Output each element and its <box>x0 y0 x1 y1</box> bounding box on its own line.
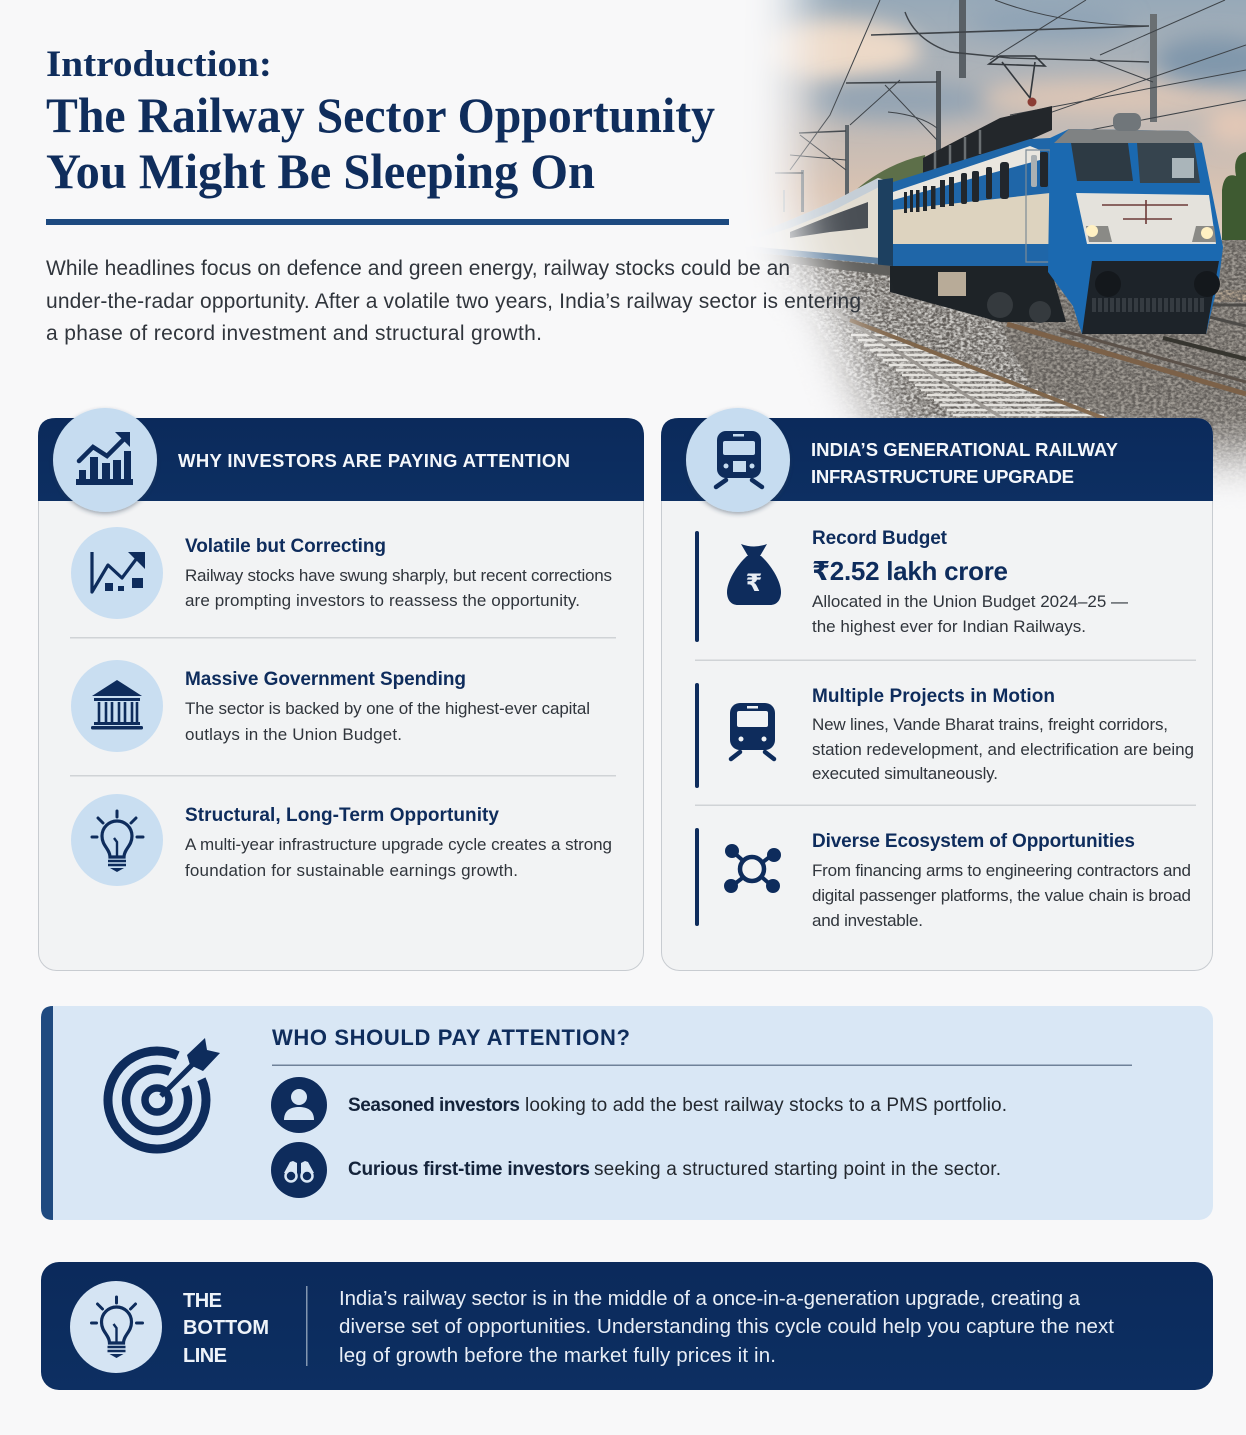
passenger coaches <box>768 178 893 276</box>
panel heading: INFRASTRUCTURE UPGRADE <box>811 466 1074 487</box>
heading line two: You Might Be Sleeping On <box>46 143 595 199</box>
item: record budget: ₹2.52 lakh crore <box>812 556 1008 586</box>
item: record budget: Allocated in the Union Budget 2024–25 — <box>812 592 1128 611</box>
panel: who should pay attention <box>41 1006 1213 1220</box>
bottom line text: diverse set of opportunities. Understanding this cycle could help you capture the next <box>339 1315 1114 1338</box>
panel: generational railway infrastructure upgrade <box>661 408 1213 970</box>
item: multiple projects in motion: station redevelopment, and electrification are being <box>812 740 1194 759</box>
item: volatile but correcting <box>71 527 612 619</box>
icon: train badge <box>686 408 790 512</box>
intro paragraph: under-the-radar opportunity. After a volatile two years, India’s railway sector is entering <box>46 290 861 313</box>
intro paragraph: a phase of record investment and structural growth. <box>46 322 542 345</box>
ground and ballast <box>774 240 1246 489</box>
audience: seasoned investors <box>271 1077 1007 1133</box>
bottom line text: India’s railway sector is in the middle of a once-in-a-generation upgrade, creating a <box>339 1287 1081 1310</box>
panel heading <box>811 439 1119 487</box>
title rule <box>46 219 729 225</box>
item: volatile but correcting: Railway stocks have swung sharply, but recent corrections <box>185 566 612 585</box>
item: record budget: ₹ <box>746 570 762 597</box>
bottom line text <box>339 1287 1114 1367</box>
hero photo: electric train on tracks <box>766 0 1246 489</box>
item: multiple projects in motion: New lines, Vande Bharat trains, freight corridors, <box>812 715 1168 734</box>
item: volatile but correcting: are prompting investors to reassess the opportunity. <box>185 591 580 610</box>
item: massive government spending <box>71 660 590 752</box>
item: structural long-term opportunity <box>71 794 612 886</box>
item: massive government spending: outlays in the Union Budget. <box>185 725 402 744</box>
cab front <box>1048 129 1223 334</box>
panel header bar <box>661 418 1213 501</box>
item: structural long-term opportunity: foundation for sustainable earnings growth. <box>185 861 518 880</box>
item: multiple projects in motion <box>695 683 1194 788</box>
audience: seasoned investors: looking to add the best railway stocks to a PMS portfolio. <box>525 1095 1007 1116</box>
item: record budget <box>695 528 1128 642</box>
audience: seasoned investors: Seasoned investors <box>348 1095 520 1116</box>
icon: growth chart badge <box>53 408 157 512</box>
item: massive government spending: Massive Government Spending <box>185 669 466 690</box>
item: structural long-term opportunity: A multi-year infrastructure upgrade cycle creates a strong <box>185 835 612 854</box>
item: massive government spending: The sector is backed by one of the highest-ever capital <box>185 699 590 718</box>
item: diverse ecosystem of opportunities <box>695 828 1191 930</box>
label: the bottom line: THE <box>183 1290 222 1312</box>
eyebrow: Introduction: Introduction: <box>46 44 272 85</box>
item: multiple projects in motion: executed simultaneously. <box>812 764 998 783</box>
item: volatile but correcting: Volatile but Correcting <box>185 536 386 557</box>
item: record budget: the highest ever for Indian Railways. <box>812 617 1086 636</box>
item: diverse ecosystem of opportunities: and investable. <box>812 911 923 930</box>
panel: the bottom line <box>41 1262 1213 1390</box>
icon: target with arrow <box>108 1038 220 1149</box>
bottom line text: leg of growth before the market fully prices it in. <box>339 1344 776 1367</box>
panel header bar <box>38 418 644 501</box>
panel heading: INDIA’S GENERATIONAL RAILWAY <box>811 439 1119 460</box>
item: diverse ecosystem of opportunities: digital passenger platforms, the value chain is broad <box>812 886 1191 905</box>
icon: light bulb <box>70 1281 162 1373</box>
item: structural long-term opportunity: Structural, Long-Term Opportunity <box>185 805 499 826</box>
hill and trees <box>857 152 1246 240</box>
label: the bottom line <box>183 1290 269 1367</box>
intro paragraph <box>46 257 861 345</box>
sky with clouds <box>766 0 1246 240</box>
item: record budget: Record Budget <box>812 528 948 549</box>
item: diverse ecosystem of opportunities: From financing arms to engineering contractors and <box>812 861 1191 880</box>
panel heading: WHY INVESTORS ARE PAYING ATTENTION <box>178 450 570 471</box>
item: multiple projects in motion: Multiple Projects in Motion <box>812 686 1055 707</box>
section heading: WHO SHOULD PAY ATTENTION? <box>272 1025 630 1050</box>
title block <box>46 44 715 199</box>
item: diverse ecosystem of opportunities: Diverse Ecosystem of Opportunities <box>812 831 1135 852</box>
intro paragraph: While headlines focus on defence and green energy, railway stocks could be an <box>46 257 790 280</box>
pantograph <box>989 56 1045 106</box>
label: the bottom line: BOTTOM <box>183 1317 269 1339</box>
panel: why investors are paying attention <box>38 408 644 970</box>
audience: curious first-time investors: Curious first-time investors <box>348 1159 590 1180</box>
overhead masts and wires <box>775 0 1246 212</box>
locomotive <box>890 106 1223 334</box>
label: the bottom line: LINE <box>183 1345 227 1367</box>
audience: curious first-time investors <box>271 1142 1001 1198</box>
railway tracks <box>798 288 1246 418</box>
audience: curious first-time investors: seeking a structured starting point in the sector. <box>594 1159 1001 1180</box>
heading line one: The Railway Sector Opportunity <box>46 87 715 143</box>
